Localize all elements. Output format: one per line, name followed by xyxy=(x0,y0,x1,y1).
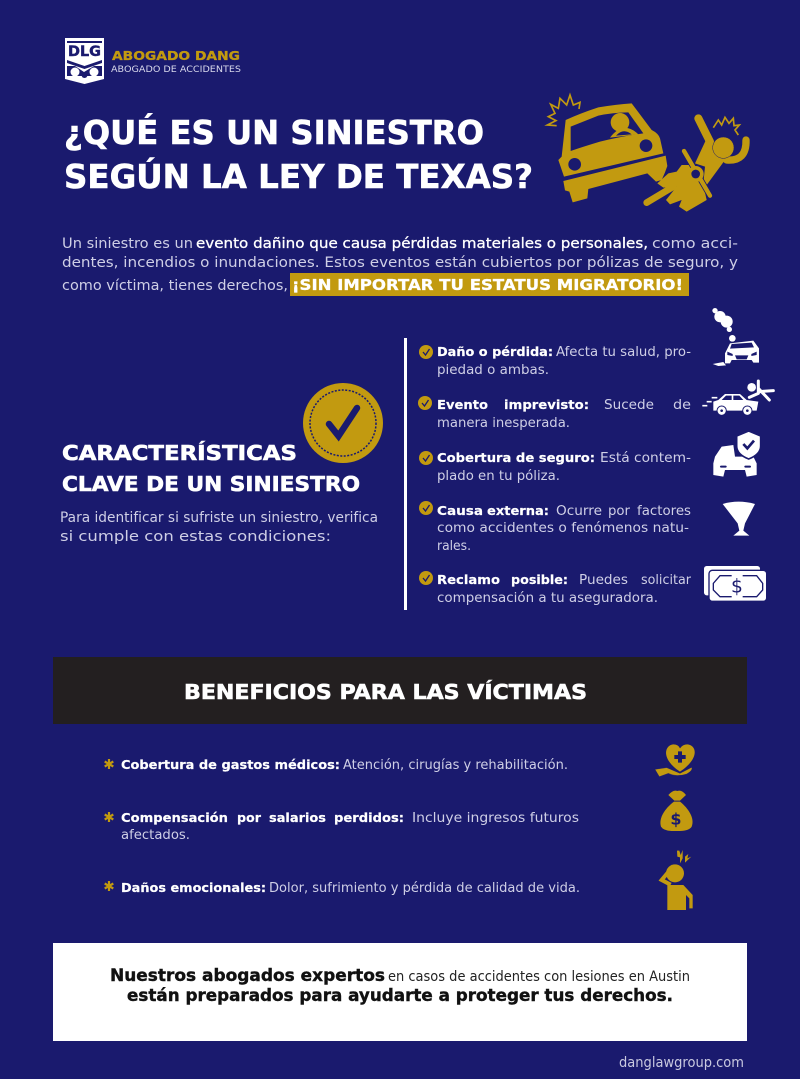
heading: characteristics xyxy=(62,440,360,496)
highlight: migration status: ¡SIN IMPORTAR TU ESTATUS MIGRATORIO! xyxy=(292,276,683,294)
intro paragraph: como víctima, tienes derechos, xyxy=(62,278,288,294)
icon: money bag xyxy=(660,791,693,831)
icon: banknotes: $ xyxy=(731,577,743,598)
callout: call to action: Nuestros abogados expertos xyxy=(110,966,385,986)
icon: car hitting motorcyclist xyxy=(547,95,746,212)
item: possible claim: solicitar xyxy=(641,573,692,588)
characteristics description: si cumple con estas condiciones: xyxy=(60,529,331,545)
icons: benefits xyxy=(655,744,695,910)
intro paragraph: evento dañino que causa pérdidas materiales o personales, xyxy=(196,236,648,252)
panel: characteristics intro xyxy=(60,383,383,545)
title xyxy=(64,112,533,196)
logo name: ABOGADO DANG xyxy=(112,49,240,63)
motorcyclist xyxy=(647,118,746,212)
benefit: lost wages: por xyxy=(237,810,262,825)
heading: characteristics: CARACTERÍSTICAS xyxy=(62,440,297,465)
item: external cause: rales. xyxy=(437,539,471,554)
logo tagline: ABOGADO DE ACCIDENTES xyxy=(111,65,241,75)
benefit: lost wages: Incluye ingresos futuros xyxy=(412,811,579,826)
vertical divider xyxy=(404,338,407,610)
icon: smoking car xyxy=(712,308,759,366)
title: ¿QUÉ ES UN SINIESTRO xyxy=(64,112,484,152)
icon: insured car xyxy=(713,431,761,477)
impact burst: rider xyxy=(713,117,739,135)
benefit: lost wages xyxy=(105,810,579,843)
icon: DLG shield xyxy=(65,38,104,84)
item: insurance coverage: Cobertura de seguro: xyxy=(437,450,595,465)
heading: characteristics: CLAVE DE UN SINIESTRO xyxy=(62,472,360,496)
icon: car hitting pedestrian xyxy=(702,381,773,415)
item: external cause: externa: xyxy=(487,503,549,518)
icon: banknotes xyxy=(704,566,767,601)
item: insurance coverage: plado en tu póliza. xyxy=(437,469,560,484)
item: unforeseen event xyxy=(418,396,691,431)
benefit: medical expenses xyxy=(105,757,568,773)
benefit: lost wages: Compensación xyxy=(121,810,228,825)
benefit: medical expenses: Atención, cirugías y rehabilitación. xyxy=(343,758,568,773)
list: characteristics xyxy=(418,344,692,606)
benefit: lost wages: salarios xyxy=(269,810,326,825)
item: possible claim xyxy=(419,571,692,606)
icon: heart in hand xyxy=(655,744,695,777)
icon: money bag: $ xyxy=(670,809,682,828)
benefit: emotional damages: Daños emocionales: xyxy=(121,880,266,895)
benefit: emotional damages: Dolor, sufrimiento y pérdida de calidad de vida. xyxy=(269,881,580,896)
car xyxy=(558,103,667,202)
icon: check badge xyxy=(303,383,383,463)
item: possible claim: Reclamo xyxy=(437,572,500,587)
banner: benefits heading xyxy=(53,657,747,724)
item: external cause: por xyxy=(608,504,631,519)
item: insurance coverage xyxy=(419,450,691,484)
item: damage or loss: piedad o ambas. xyxy=(437,363,549,378)
item: external cause: como accidentes o fenómenos natu- xyxy=(437,521,689,536)
impact burst: car xyxy=(547,95,580,126)
item: possible claim: posible: xyxy=(511,572,568,587)
benefit: medical expenses: Cobertura de gastos médicos: xyxy=(121,757,340,772)
list: benefits xyxy=(105,757,580,896)
benefit: lost wages: afectados. xyxy=(121,828,190,843)
item: damage or loss xyxy=(419,344,691,378)
benefit: lost wages: perdidos: xyxy=(334,810,404,825)
icons: characteristics xyxy=(702,308,773,601)
item: unforeseen event: imprevisto: xyxy=(504,397,589,412)
item: insurance coverage: Está contem- xyxy=(600,451,691,466)
item: unforeseen event: Evento xyxy=(437,397,488,412)
item: unforeseen event: de xyxy=(673,398,691,413)
intro paragraph: Un siniestro es un xyxy=(62,236,193,252)
icon: person with headache xyxy=(662,850,693,910)
callout: call to action xyxy=(53,943,747,1041)
icon: tornado xyxy=(723,502,755,536)
benefit: emotional damages xyxy=(105,880,580,896)
item: damage or loss: Afecta tu salud, pro- xyxy=(556,345,691,360)
item: unforeseen event: manera inesperada. xyxy=(437,416,570,431)
icon: DLG shield: DLG xyxy=(68,44,101,60)
item: possible claim: Puedes xyxy=(579,573,628,588)
banner: benefits heading: BENEFICIOS PARA LAS VÍCTIMAS xyxy=(184,680,587,704)
characteristics description: Para identificar si sufriste un siniestro, verifica xyxy=(60,510,378,526)
item: external cause xyxy=(419,501,691,554)
callout: call to action: están preparados para ayudarte a proteger tus derechos. xyxy=(127,986,673,1006)
item: damage or loss: Daño o pérdida: xyxy=(437,344,553,359)
logo xyxy=(65,38,241,84)
intro paragraph: dentes, incendios o inundaciones. Estos eventos están cubiertos por pólizas de seguro, y xyxy=(62,255,738,271)
item: external cause: factores xyxy=(637,504,691,519)
item: external cause: Causa xyxy=(437,503,483,518)
intro paragraph: como acci- xyxy=(652,236,738,252)
item: unforeseen event: Sucede xyxy=(604,398,654,413)
item: external cause: Ocurre xyxy=(556,504,602,519)
characteristics description xyxy=(60,510,378,545)
title: SEGÚN LA LEY DE TEXAS? xyxy=(64,156,533,196)
website: danglawgroup.com xyxy=(619,1055,744,1071)
item: possible claim: compensación a tu aseguradora. xyxy=(437,591,658,606)
intro paragraph xyxy=(62,236,738,296)
callout: call to action: en casos de accidentes con lesiones en Austin xyxy=(388,969,690,985)
highlight: migration status xyxy=(290,273,689,296)
